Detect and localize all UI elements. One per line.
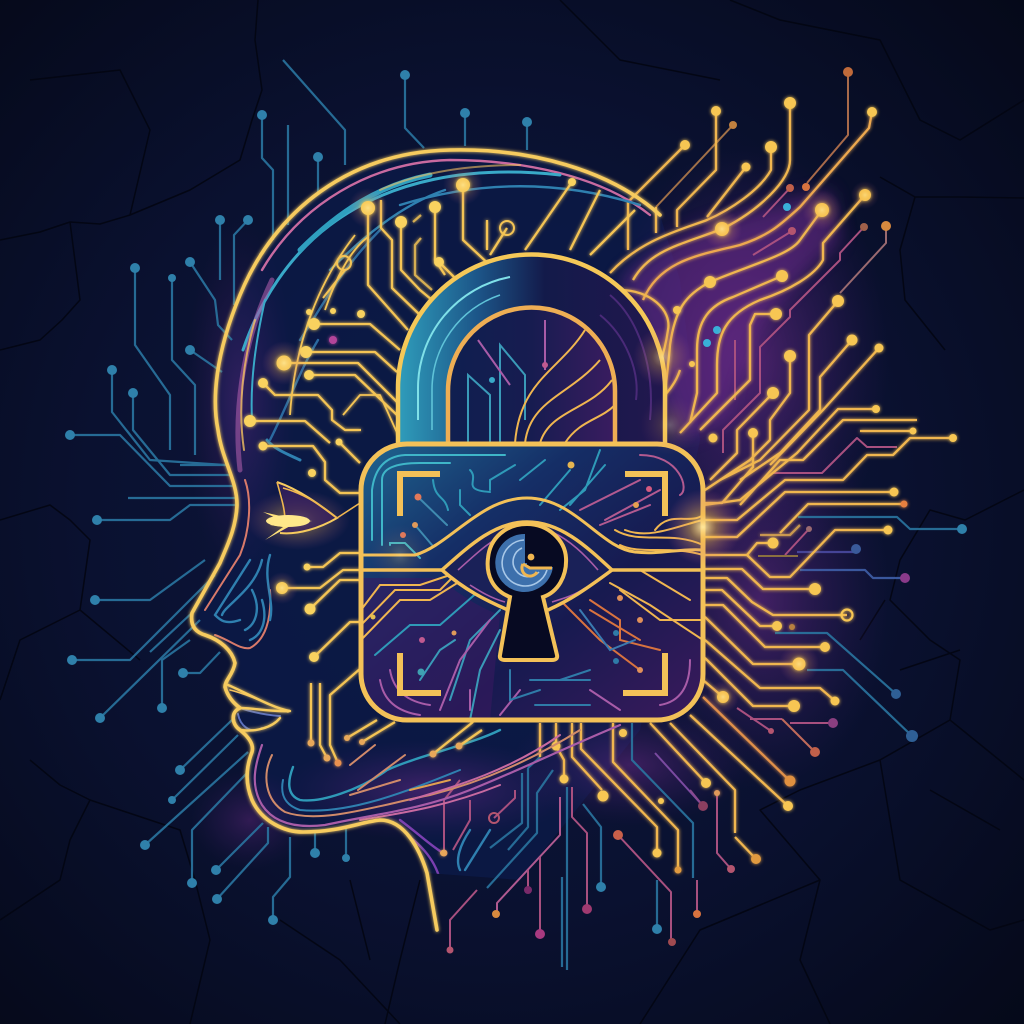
- muted nodes: [440, 67, 910, 954]
- ring node: [489, 813, 499, 823]
- face contours: [205, 480, 249, 610]
- gold nodes: [552, 97, 957, 874]
- blue circuit traces left and top: [70, 60, 962, 970]
- blue circuit nodes: [65, 70, 967, 934]
- eye with keyhole: [442, 522, 612, 660]
- padlock body: [361, 444, 703, 720]
- shackle inner circuit: [468, 320, 615, 443]
- keyhole: [488, 524, 566, 660]
- horizontal band lines: [361, 498, 703, 570]
- body lower purple wash: [363, 578, 500, 720]
- head fill: [192, 150, 700, 880]
- purple glow nebula: [185, 145, 890, 870]
- bright glow accents: [262, 165, 879, 713]
- padlock shackle: [398, 254, 665, 443]
- muted pink and brown circuit traces: [444, 72, 897, 950]
- corner brackets: [400, 474, 665, 693]
- head outline: [192, 150, 660, 930]
- face eye with flare: [246, 482, 360, 550]
- head inner contour bands: [205, 160, 650, 880]
- head circuit traces: [250, 182, 635, 763]
- head nodes: [244, 178, 576, 856]
- iris spiral: [495, 534, 553, 592]
- body circuit nodes: [370, 462, 652, 676]
- body circuit traces: [361, 450, 703, 720]
- gold wavy circuit traces: [540, 103, 953, 870]
